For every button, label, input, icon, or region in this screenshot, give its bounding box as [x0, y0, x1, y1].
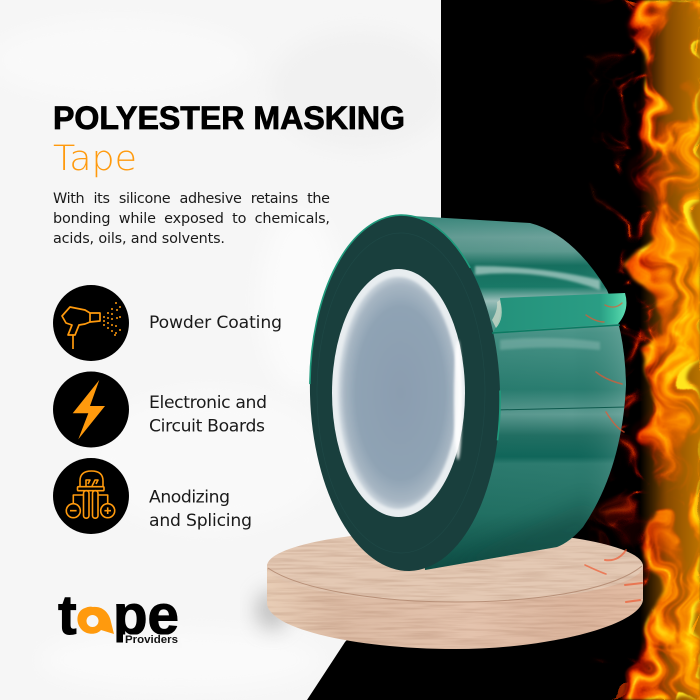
logo: tape providers [58, 583, 182, 648]
logo: tape providers: Providers [125, 634, 178, 646]
label: electronic and circuit boards: Electronic and [149, 393, 267, 413]
label: powder coating: Powder Coating [149, 313, 282, 333]
description text: With its silicone adhesive retains the [53, 191, 330, 207]
title: POLYESTER MASKING [53, 100, 405, 136]
tape face [305, 213, 505, 573]
peeled tape flap [493, 293, 626, 332]
flame wisps on product [585, 303, 642, 602]
product: green tape roll [305, 213, 642, 602]
fire column [585, 0, 700, 700]
icon: led with terminals [53, 458, 129, 534]
description text: acids, oils, and solvents. [53, 231, 225, 247]
black background panel [307, 0, 700, 700]
wood platform [256, 530, 643, 649]
logo: tape providers: pe [113, 583, 179, 646]
label: anodizing and splicing: and Splicing [149, 511, 252, 531]
label: electronic and circuit boards: Circuit Boards [149, 416, 265, 436]
icon: lightning bolt [53, 372, 129, 448]
tape core hollow [338, 277, 458, 509]
description text: bonding while exposed to chemicals, [53, 211, 330, 227]
tape core ring [332, 269, 465, 517]
feature: powder coating [53, 285, 282, 361]
platform shadow [256, 590, 288, 630]
icon: spray gun [53, 285, 129, 361]
platform top [267, 530, 643, 602]
subtitle: Tape [53, 139, 137, 179]
title [53, 100, 405, 179]
icon: orange tape roll letter a [77, 607, 114, 634]
feature: anodizing and splicing [53, 458, 252, 534]
label: anodizing and splicing [149, 488, 252, 531]
label: electronic and circuit boards [149, 393, 267, 436]
description text [53, 191, 330, 247]
tape outer wall [412, 216, 626, 570]
wood grain [267, 530, 643, 649]
label: anodizing and splicing: Anodizing [149, 488, 230, 508]
feature: electronic and circuit boards [53, 372, 267, 448]
logo: tape providers: t [58, 583, 77, 646]
platform side [267, 566, 643, 649]
